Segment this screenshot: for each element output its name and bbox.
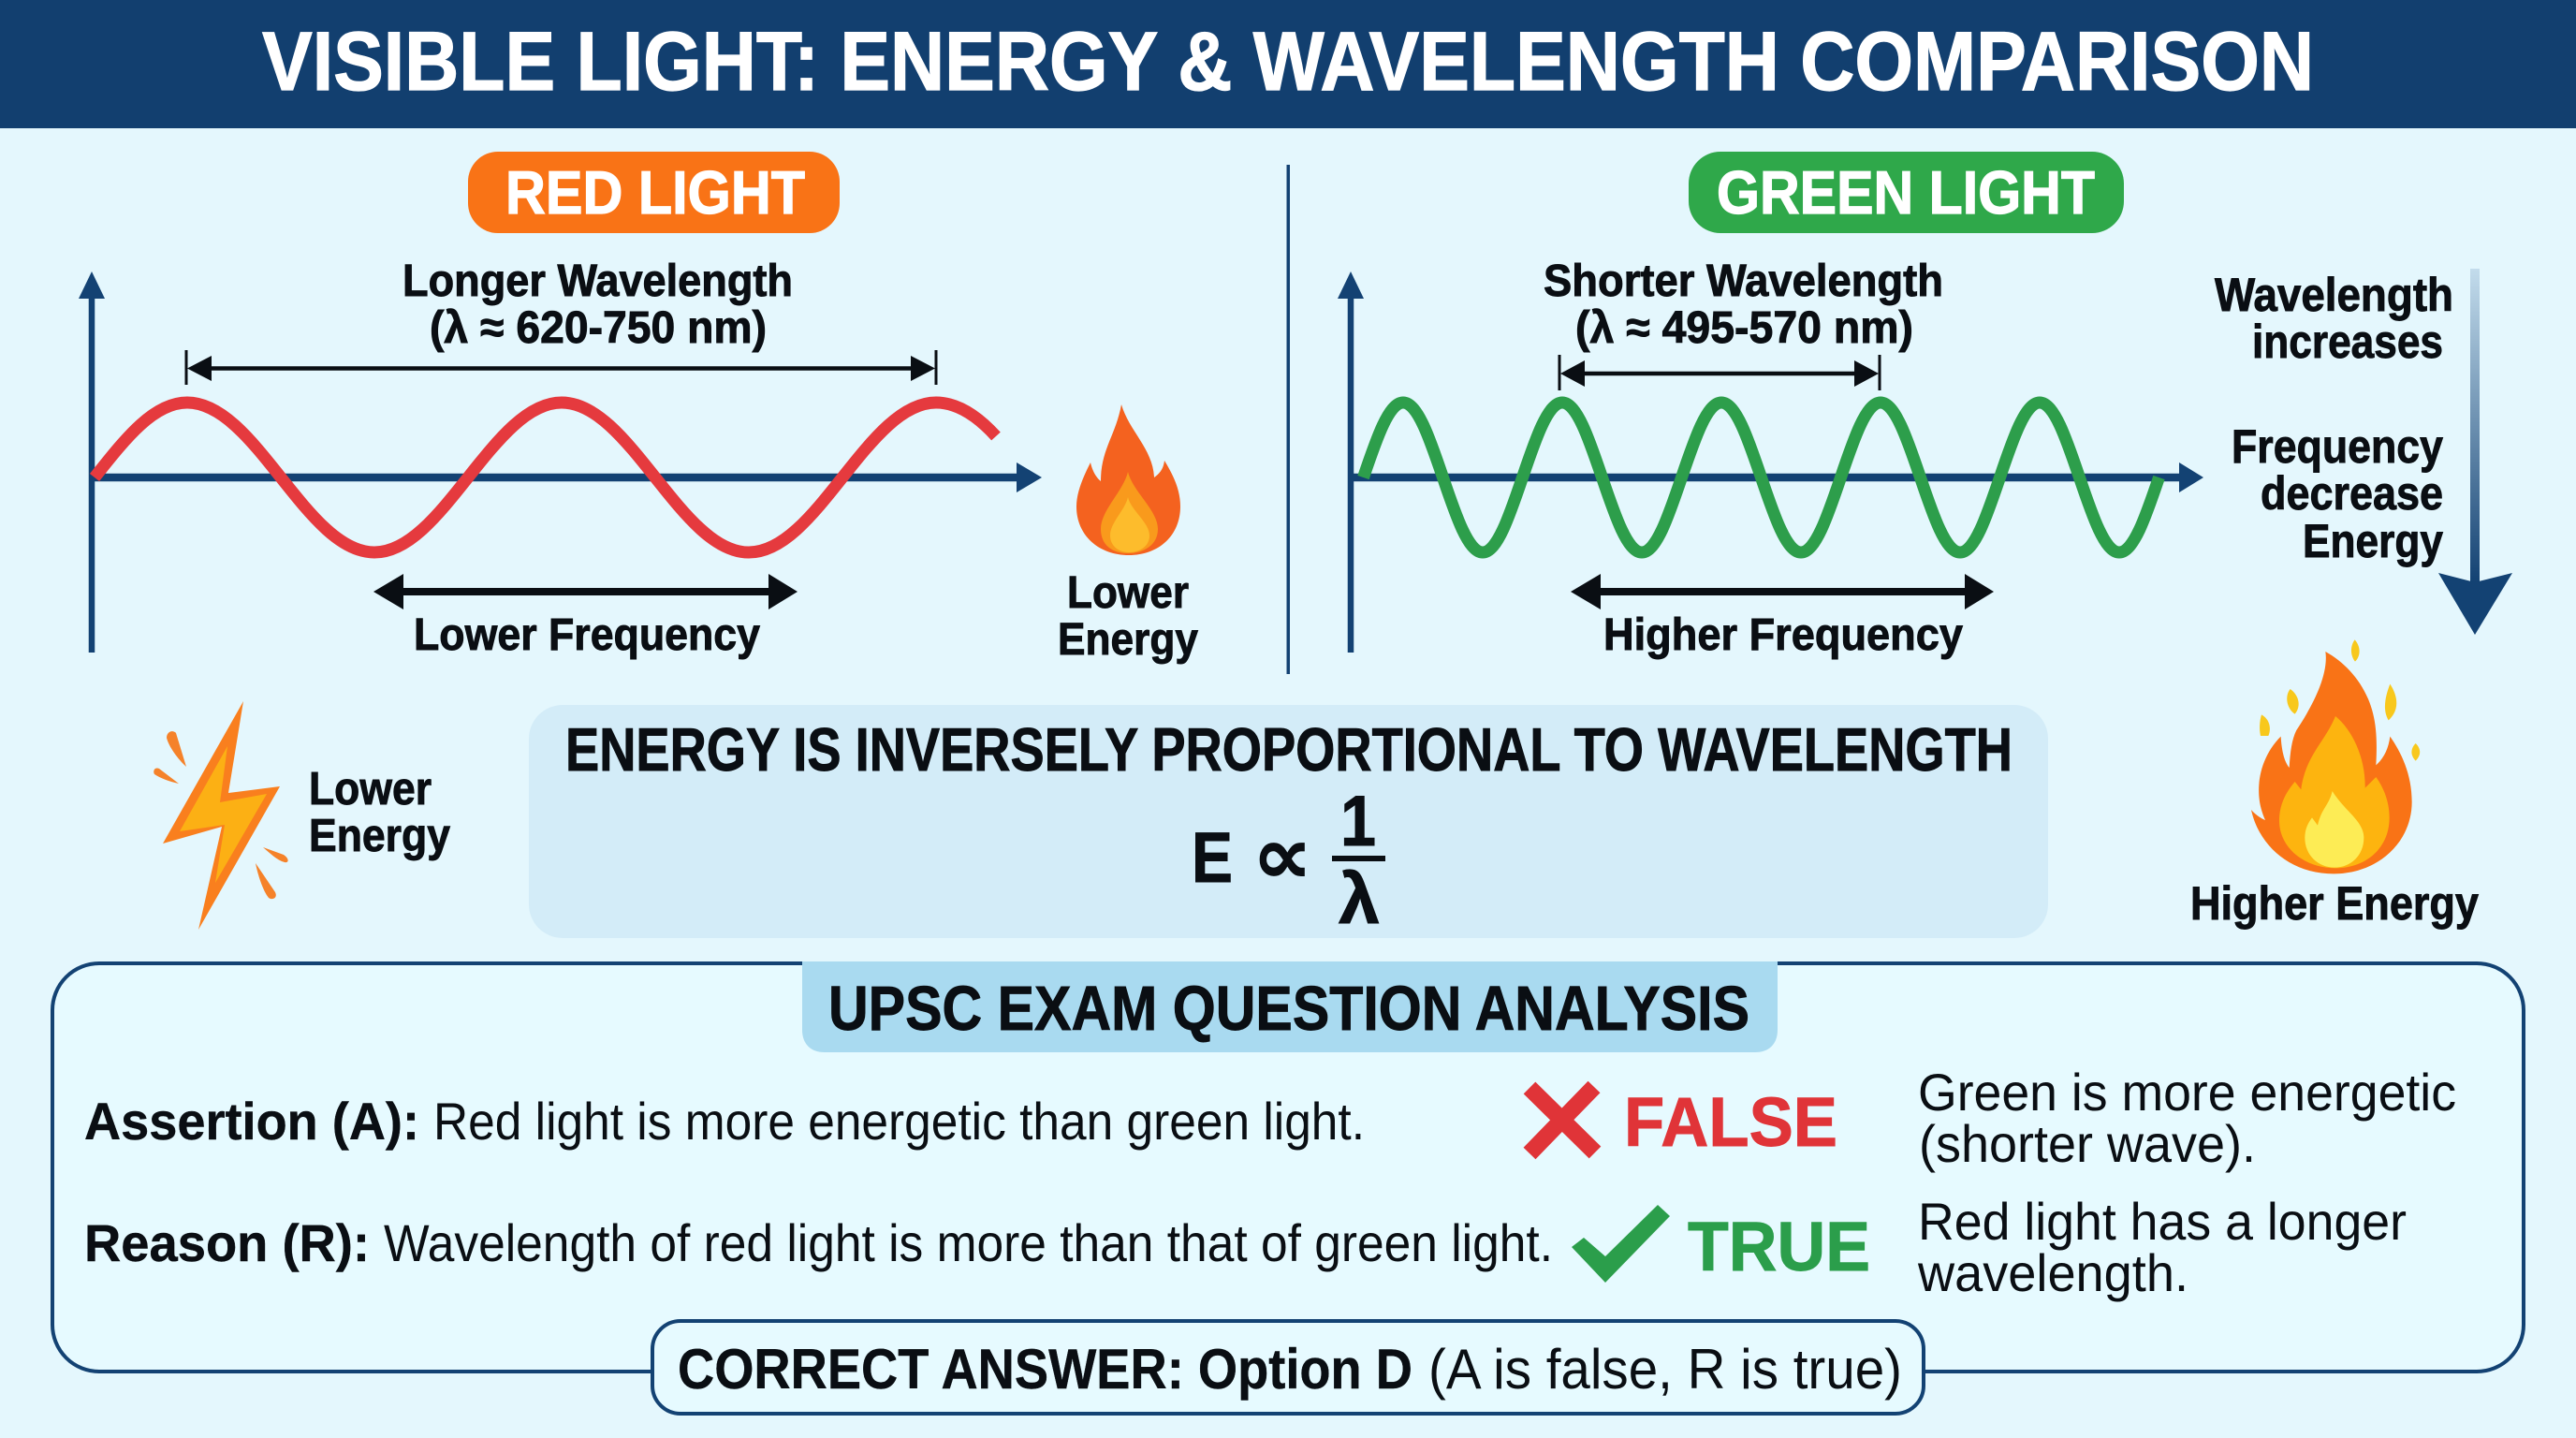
formula: ∝ — [1252, 810, 1312, 902]
lower energy label: Lower — [309, 764, 432, 814]
formula: E — [1192, 818, 1233, 898]
trend labels: Energy — [2303, 515, 2443, 567]
higher frequency arrow — [1571, 574, 1994, 609]
lower energy label — [1058, 568, 1198, 665]
red wave — [95, 403, 996, 552]
lower energy label: Energy — [309, 811, 450, 861]
title banner: VISIBLE LIGHT: ENERGY & WAVELENGTH COMPARISON — [262, 14, 2314, 108]
longer wavelength label: Longer Wavelength — [402, 257, 793, 306]
false verdict: FALSE — [1624, 1083, 1837, 1161]
panel: energy formula — [529, 705, 2048, 939]
analysis heading tab — [802, 961, 1778, 1052]
wavelength span arrow — [1559, 355, 1880, 390]
longer wavelength label — [402, 257, 793, 353]
reason statement: Wavelength of red light is more than that of green light. — [384, 1213, 1553, 1272]
analysis heading tab: UPSC EXAM QUESTION ANALYSIS — [828, 974, 1749, 1044]
icon: lightning bolt — [154, 701, 288, 930]
arrow: downward trend — [2438, 269, 2512, 635]
lower frequency arrow — [373, 574, 798, 609]
formula heading: ENERGY IS INVERSELY PROPORTIONAL TO WAVELENGTH — [565, 715, 2012, 784]
reason statement: Reason (R): — [84, 1213, 370, 1272]
green light badge: GREEN LIGHT — [1717, 158, 2095, 227]
panel: red light — [79, 152, 1198, 665]
icon: large flame — [2251, 639, 2420, 873]
formula: 1 — [1340, 782, 1376, 861]
panel: UPSC exam analysis — [52, 961, 2524, 1414]
center divider — [1286, 165, 1290, 674]
icon: green check — [1572, 1205, 1670, 1283]
shorter wavelength label: (λ ≈ 495-570 nm) — [1575, 303, 1913, 353]
lower energy label: Lower — [1067, 568, 1189, 618]
trend labels: Frequency — [2232, 420, 2443, 473]
trend labels: decrease — [2261, 467, 2443, 520]
higher frequency label: Higher Frequency — [1603, 610, 1963, 660]
icon: small flame — [1076, 404, 1180, 555]
assertion statement: Red light is more energetic than green light. — [433, 1092, 1365, 1151]
longer wavelength label: (λ ≈ 620-750 nm) — [430, 303, 767, 353]
axes — [1338, 271, 2203, 653]
lower energy label: Energy — [1058, 615, 1198, 665]
trend labels: Wavelength — [2215, 269, 2453, 321]
formula: λ — [1339, 859, 1380, 939]
trend labels: increases — [2252, 315, 2443, 368]
true explanation — [1917, 1192, 2407, 1302]
icon: red cross — [1530, 1087, 1595, 1153]
axes — [79, 271, 1042, 653]
shorter wavelength label: Shorter Wavelength — [1544, 257, 1943, 306]
green wave — [1363, 403, 2159, 552]
red light badge: RED LIGHT — [505, 158, 805, 227]
correct answer box — [652, 1321, 1924, 1414]
false explanation: Green is more energetic — [1918, 1063, 2456, 1122]
lower energy label — [309, 764, 450, 861]
wavelength span arrow — [186, 350, 936, 385]
false explanation: (shorter wave). — [1919, 1114, 2256, 1173]
title banner — [0, 0, 2576, 128]
trend labels — [2215, 269, 2453, 567]
assertion statement: Assertion (A): — [84, 1092, 419, 1151]
false explanation — [1918, 1063, 2456, 1173]
shorter wavelength label — [1544, 257, 1943, 353]
correct answer box: CORRECT ANSWER: Option D — [678, 1338, 1412, 1401]
correct answer box: (A is false, R is true) — [1428, 1338, 1902, 1401]
panel: green light — [1338, 152, 2203, 660]
true verdict: TRUE — [1688, 1208, 1870, 1285]
assertion statement — [84, 1092, 1365, 1151]
true explanation: Red light has a longer — [1918, 1192, 2407, 1251]
true explanation: wavelength. — [1917, 1243, 2188, 1302]
higher energy label: Higher Energy — [2190, 877, 2479, 930]
formula — [1192, 782, 1385, 939]
lower frequency label: Lower Frequency — [414, 610, 760, 660]
